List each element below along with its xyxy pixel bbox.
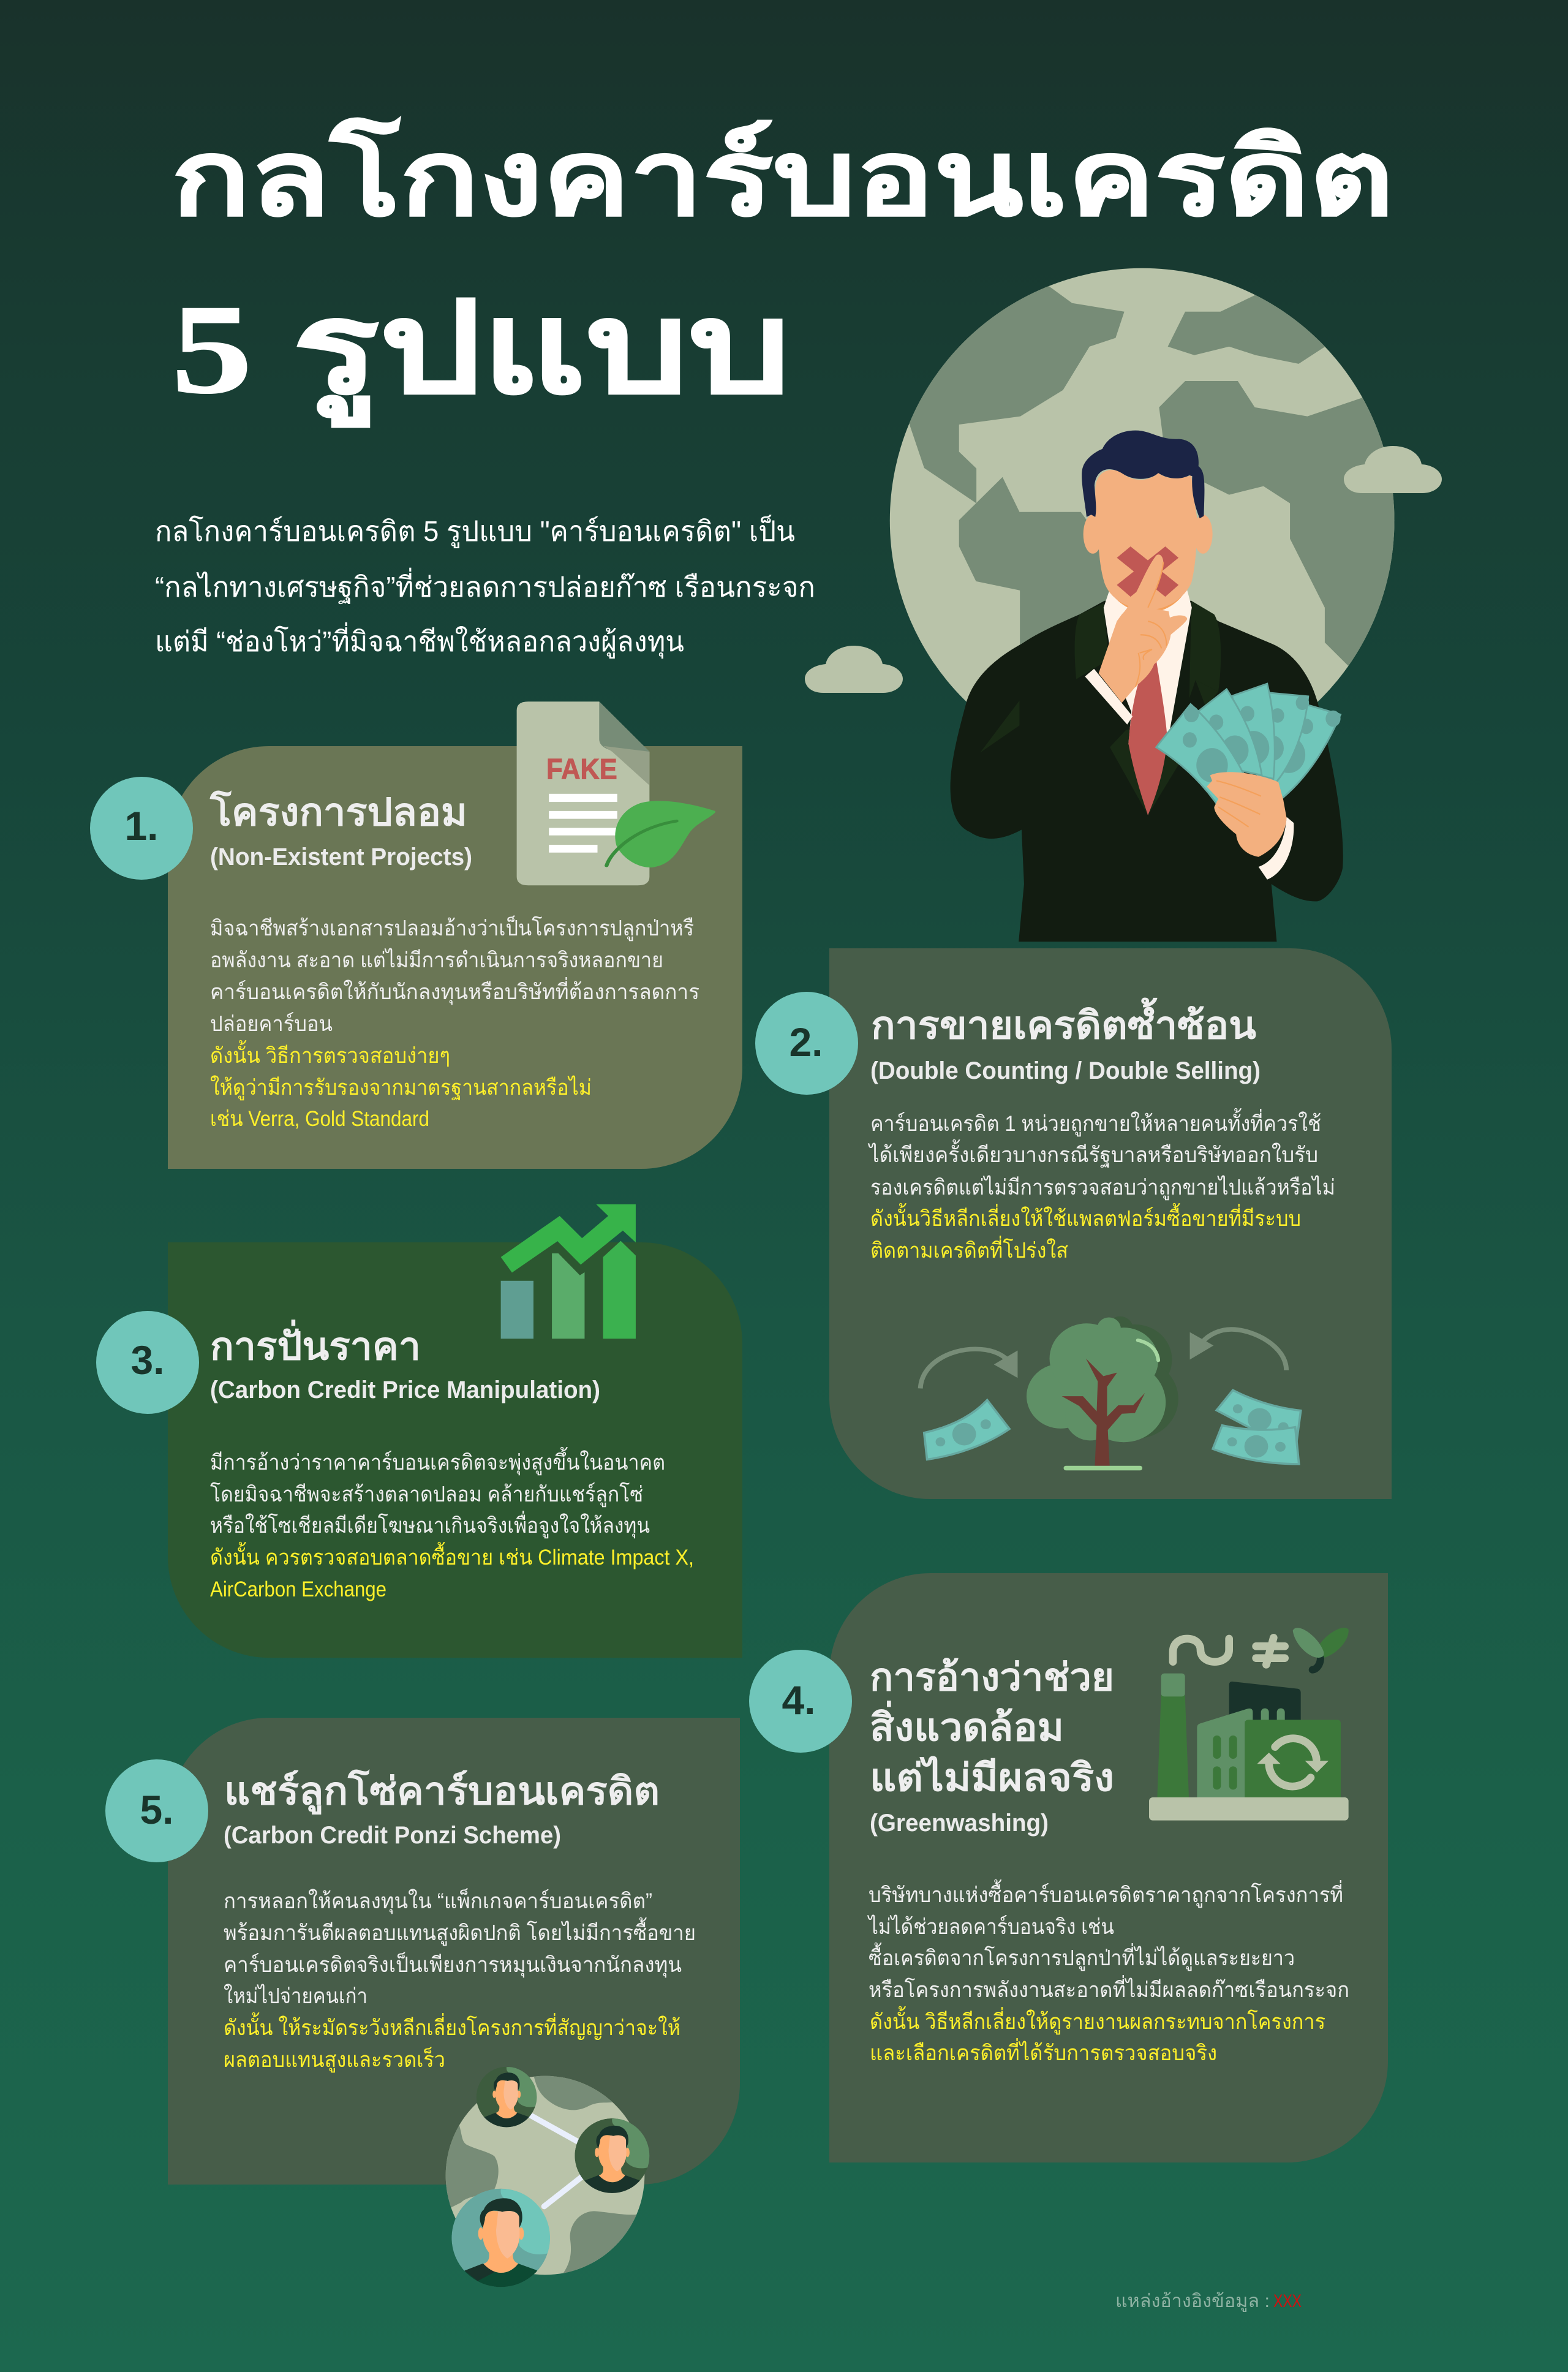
body 3: โดยมิจฉาชีพจะสร้างตลาดปลอม คล้ายกับแชร์ลูกโซ่ <box>210 1482 643 1507</box>
heading 1 <box>209 790 472 871</box>
mouth tape X <box>1117 546 1178 597</box>
body 2 <box>867 1108 1335 1263</box>
illustration: businessman with globe and money <box>889 268 1395 942</box>
body 3: ดังนั้น ควรตรวจสอบตลาดซื้อขาย เช่น Climate Impact X, <box>210 1541 694 1569</box>
heading 2 <box>870 997 1261 1084</box>
heading 5: (Carbon Credit Ponzi Scheme) <box>224 1822 561 1849</box>
heading 1: โครงการปลอม <box>209 790 467 834</box>
cloud left <box>805 646 903 693</box>
heading 2: (Double Counting / Double Selling) <box>870 1057 1261 1084</box>
arrows <box>921 1329 1286 1388</box>
body 4: หรือโครงการพลังงานสะอาดที่ไม่มีผลลดก๊าซเรือนกระจก <box>869 1975 1349 2002</box>
icon: rising bar chart <box>501 1204 636 1339</box>
banknotes fan <box>1156 684 1341 809</box>
panel 3: price manipulation <box>96 1204 742 1658</box>
title: กลโกงคาร์บอนเครดิต <box>172 117 1394 238</box>
icon: globe network of people <box>437 2066 655 2291</box>
badge 1 <box>90 777 193 880</box>
hair <box>1082 431 1204 518</box>
body 2: ดังนั้นวิธีหลีกเลี่ยงให้ใช้แพลตฟอร์มซื้อขายที่มีระบบ <box>870 1203 1301 1231</box>
body 2: คาร์บอนเครดิต 1 หน่วยถูกขายให้หลายคนทั้งที่ควรใช้ <box>870 1108 1321 1136</box>
body 5 <box>224 1888 696 2072</box>
suit <box>951 601 1343 942</box>
panel 1: non-existent projects <box>90 701 742 1169</box>
badge 3: 3. <box>130 1337 165 1383</box>
avatar small <box>477 2067 540 2129</box>
lapels <box>980 601 1221 815</box>
avatar medium <box>575 2118 654 2196</box>
body 4: ซื้อเครดิตจากโครงการปลูกป่าที่ไม่ได้ดูแลระยะยาว <box>869 1942 1295 1971</box>
avatar large <box>451 2189 556 2291</box>
body 1: คาร์บอนเครดิตให้กับนักลงทุนหรือบริษัทที่ต้องการลดการ <box>210 977 699 1005</box>
face <box>1095 470 1197 610</box>
heading 1: (Non-Existent Projects) <box>210 844 472 871</box>
body 3 <box>210 1446 694 1601</box>
body 4: ดังนั้น วิธีหลีกเลี่ยงให้ดูรายงานผลกระทบจากโครงการ <box>870 2006 1325 2034</box>
body 5: คาร์บอนเครดิตจริงเป็นเพียงการหมุนเงินจากนักลงทุน <box>224 1952 682 1977</box>
heading 2: การขายเครดิตซ้ำซ้อน <box>871 997 1256 1047</box>
panel 5: ponzi scheme <box>105 1718 740 2291</box>
heading 5 <box>224 1769 660 1849</box>
body 1: ปล่อยคาร์บอน <box>210 1012 333 1036</box>
globe <box>889 268 1395 702</box>
body 1: ดังนั้น วิธีการตรวจสอบง่ายๆ <box>210 1040 450 1068</box>
ears <box>1084 515 1213 554</box>
body 3: AirCarbon Exchange <box>210 1577 386 1601</box>
body 5: การหลอกให้คนลงทุนใน “แพ็กเกจคาร์บอนเครดิต” <box>224 1888 652 1914</box>
tree <box>1027 1316 1178 1470</box>
heading 4: สิ่งแวดล้อม <box>870 1701 1064 1749</box>
hand holding money <box>1207 772 1287 857</box>
icon: fake document with leaf <box>517 701 715 885</box>
intro text: กลโกงคาร์บอนเครดิต 5 รูปแบบ "คาร์บอนเครดิต" เป็น <box>155 515 795 548</box>
body 2: รองเครดิตแต่ไม่มีการตรวจสอบว่าถูกขายไปแล้วหรือไม่ <box>870 1175 1335 1200</box>
icon: fake document with leaf: FAKE <box>546 753 617 785</box>
intro text: แต่มี “ช่องโหว่”ที่มิจฉาชีพใช้หลอกลวงผู้ลงทุน <box>155 622 684 659</box>
badge 5 <box>105 1759 208 1862</box>
banknotes <box>924 1390 1301 1464</box>
body 4: และเลือกเครดิตที่ได้รับการตรวจสอบจริง <box>870 2038 1217 2065</box>
heading 4: การอ้างว่าช่วย <box>870 1656 1114 1699</box>
icon: tree and banknotes <box>921 1316 1301 1470</box>
panel 2: double counting <box>755 948 1392 1499</box>
body 5: ใหม่ไปจ่ายคนเก่า <box>224 1984 368 2008</box>
badge 2: 2. <box>789 1019 823 1065</box>
shirt cuff right <box>1259 817 1294 880</box>
body 3: หรือใช้โซเชียลมีเดียโฆษณาเกินจริงเพื่อจูงใจให้ลงทุน <box>210 1511 650 1538</box>
body 5: ดังนั้น ให้ระมัดระวังหลีกเลี่ยงโครงการที่สัญญาว่าจะให้ <box>224 2012 680 2040</box>
badge 1: 1. <box>124 803 159 848</box>
panel 4: greenwashing <box>749 1573 1388 2162</box>
footer source: XXX <box>1273 2291 1302 2311</box>
badge 3 <box>96 1311 199 1414</box>
body 2: ติดตามเครดิตที่โปร่งใส <box>870 1236 1068 1263</box>
footer source: แหล่งอ้างอิงข้อมูล : <box>1115 2291 1270 2312</box>
badge 5: 5. <box>140 1787 174 1832</box>
body 1: มิจฉาชีพสร้างเอกสารปลอมอ้างว่าเป็นโครงการปลูกป่าหรื <box>210 915 694 941</box>
title <box>172 117 1394 428</box>
heading 3 <box>210 1320 600 1403</box>
heading 3: การปั่นราคา <box>210 1320 421 1368</box>
body 1 <box>210 915 699 1131</box>
body 2: ได้เพียงครั้งเดียวบางกรณีรัฐบาลหรือบริษัทออกใบรับ <box>867 1139 1318 1168</box>
shushing hand <box>1099 554 1187 703</box>
badge 4: 4. <box>782 1677 816 1723</box>
body 4: ไม่ได้ช่วยลดคาร์บอนจริง เช่น <box>867 1914 1114 1939</box>
heading 4: (Greenwashing) <box>870 1810 1049 1837</box>
shirt cuff left <box>1085 669 1133 725</box>
body 1: เช่น Verra, Gold Standard <box>210 1107 429 1131</box>
cloud right <box>1344 446 1442 493</box>
body 1: ให้ดูว่ามีการรับรองจากมาตรฐานสากลหรือไม่ <box>210 1075 592 1100</box>
badge 4 <box>749 1650 852 1753</box>
badge 2 <box>755 992 858 1095</box>
body 4 <box>867 1879 1349 2065</box>
icon: factory and leaf <box>1149 1628 1349 1821</box>
body 4: บริษัทบางแห่งซื้อคาร์บอนเครดิตราคาถูกจากโครงการที่ <box>869 1879 1343 1908</box>
heading 5: แชร์ลูกโซ่คาร์บอนเครดิต <box>224 1769 660 1815</box>
tie <box>1128 660 1167 815</box>
body 5: ผลตอบแทนสูงและรวดเร็ว <box>224 2047 445 2072</box>
shirt <box>1104 591 1192 815</box>
heading 3: (Carbon Credit Price Manipulation) <box>210 1377 600 1403</box>
neck shadow <box>1110 580 1185 613</box>
title: 5 รูปแบบ <box>172 279 791 428</box>
body 5: พร้อมการันตีผลตอบแทนสูงผิดปกติ โดยไม่มีการซื้อขาย <box>224 1917 696 1946</box>
heading 4: แต่ไม่มีผลจริง <box>870 1756 1114 1799</box>
body 1: อพลังงาน สะอาด แต่ไม่มีการดำเนินการจริงหลอกขาย <box>210 948 663 972</box>
intro text <box>155 515 815 659</box>
heading 4 <box>870 1656 1114 1837</box>
body 3: มีการอ้างว่าราคาคาร์บอนเครดิตจะพุ่งสูงขึ้นในอนาคต <box>210 1446 665 1475</box>
intro text: “กลไกทางเศรษฐกิจ”ที่ช่วยลดการปล่อยก๊าซ เรือนกระจก <box>155 567 815 604</box>
